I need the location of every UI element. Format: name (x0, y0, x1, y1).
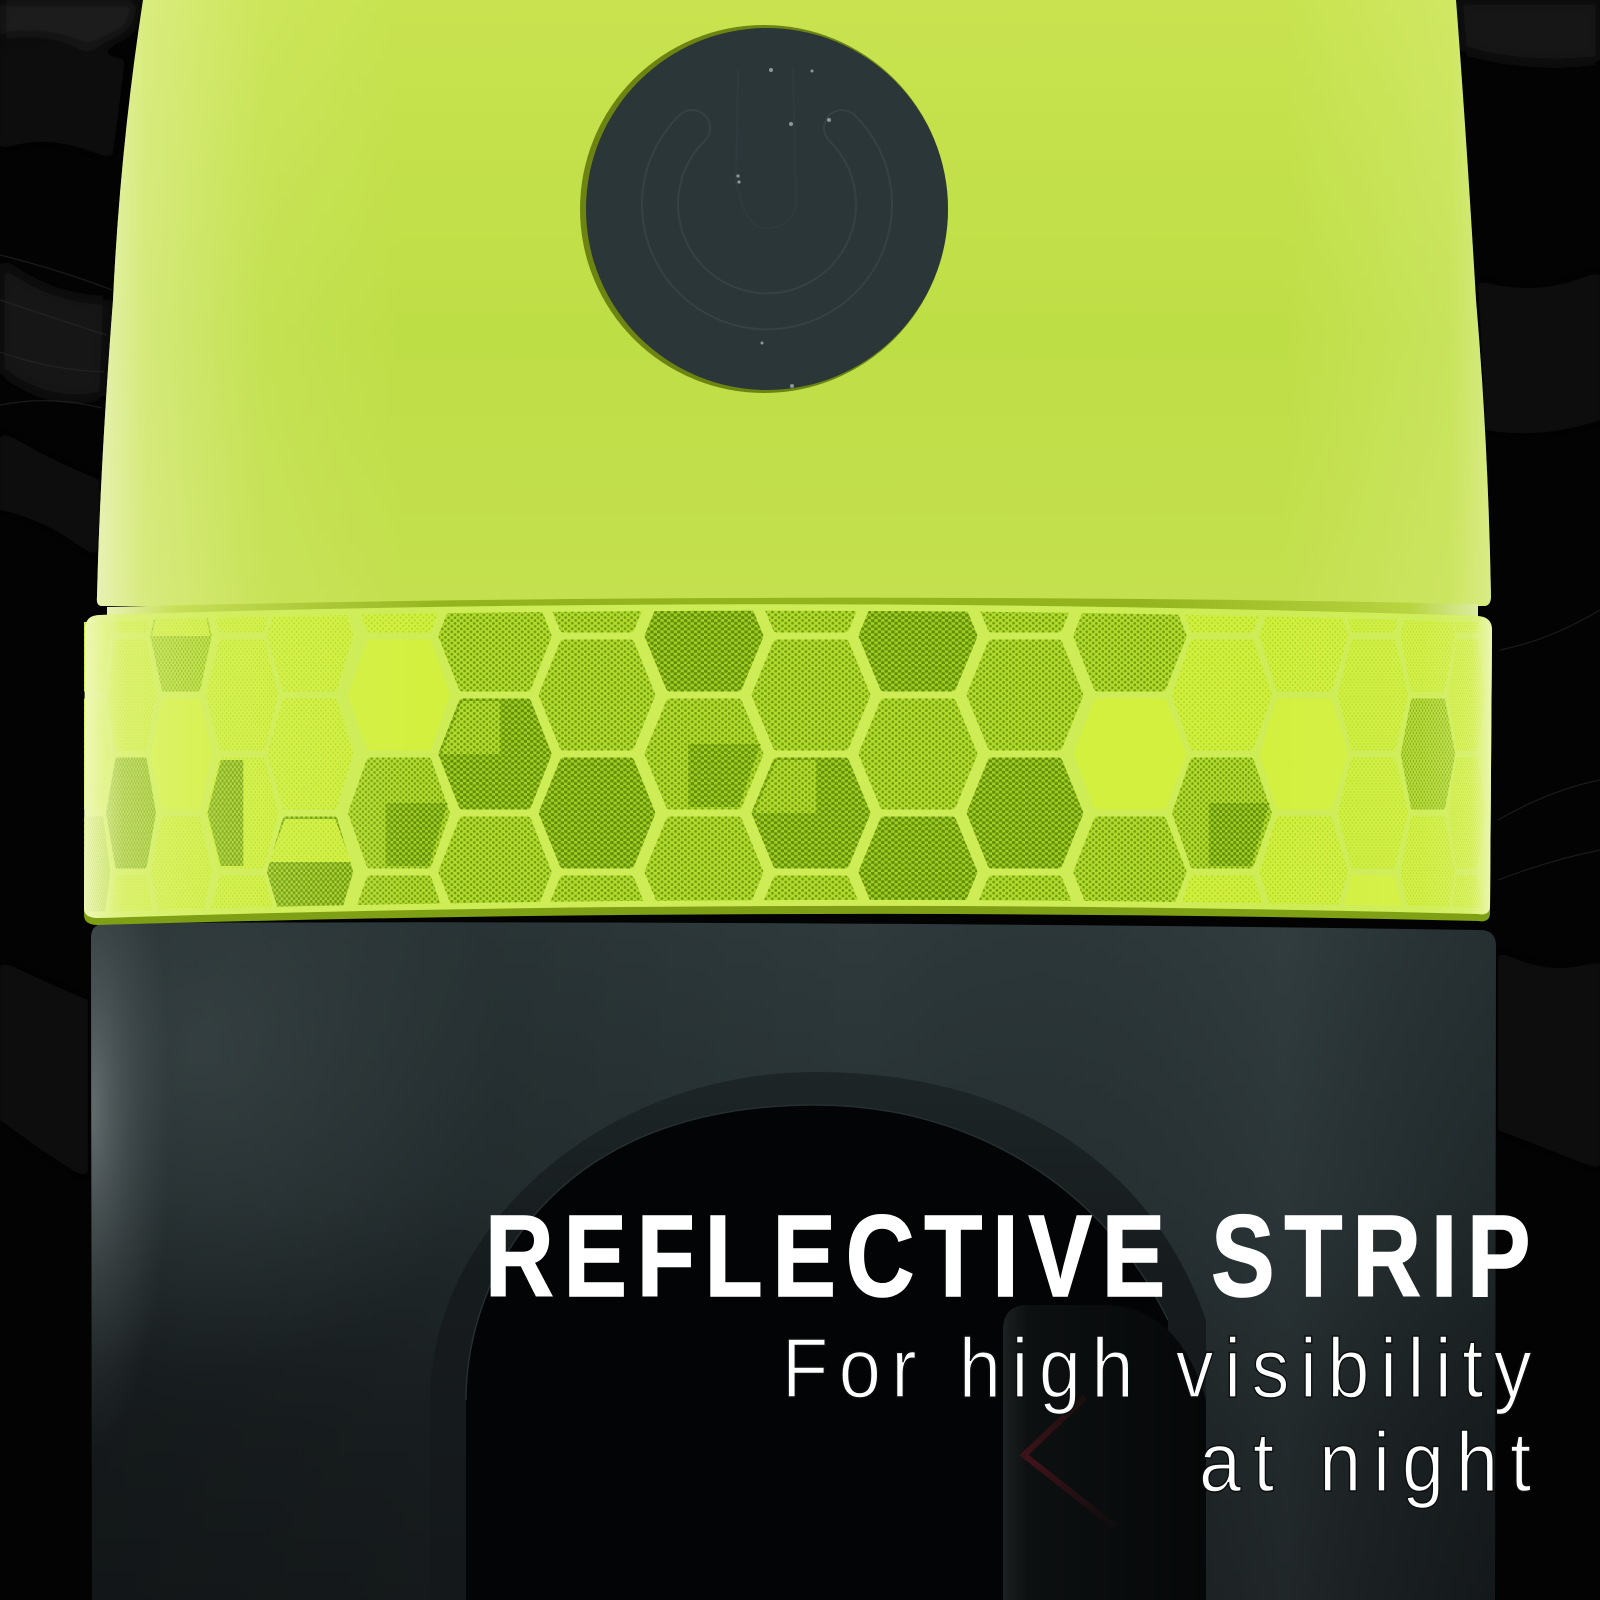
headline: REFLECTIVE STRIP (485, 1192, 1531, 1321)
lime green upper housing (97, 0, 1491, 626)
power button (580, 25, 948, 393)
reflective honeycomb strip (84, 604, 1492, 925)
button specks (736, 68, 831, 388)
hexagon cells (84, 610, 1485, 912)
handle arch opening (430, 1072, 1206, 1600)
embossed power symbol (660, 70, 874, 311)
subheading line 2: at night (1199, 1415, 1531, 1509)
dark lower handle body (91, 922, 1496, 1600)
red chevron mark (1024, 1397, 1115, 1527)
subheading line 1: For high visibility (782, 1321, 1532, 1415)
thin wisps (0, 255, 1600, 880)
clip tab inside arch (1003, 1305, 1206, 1600)
housing lower shadow band (107, 598, 1478, 626)
text block (485, 1192, 1532, 1509)
